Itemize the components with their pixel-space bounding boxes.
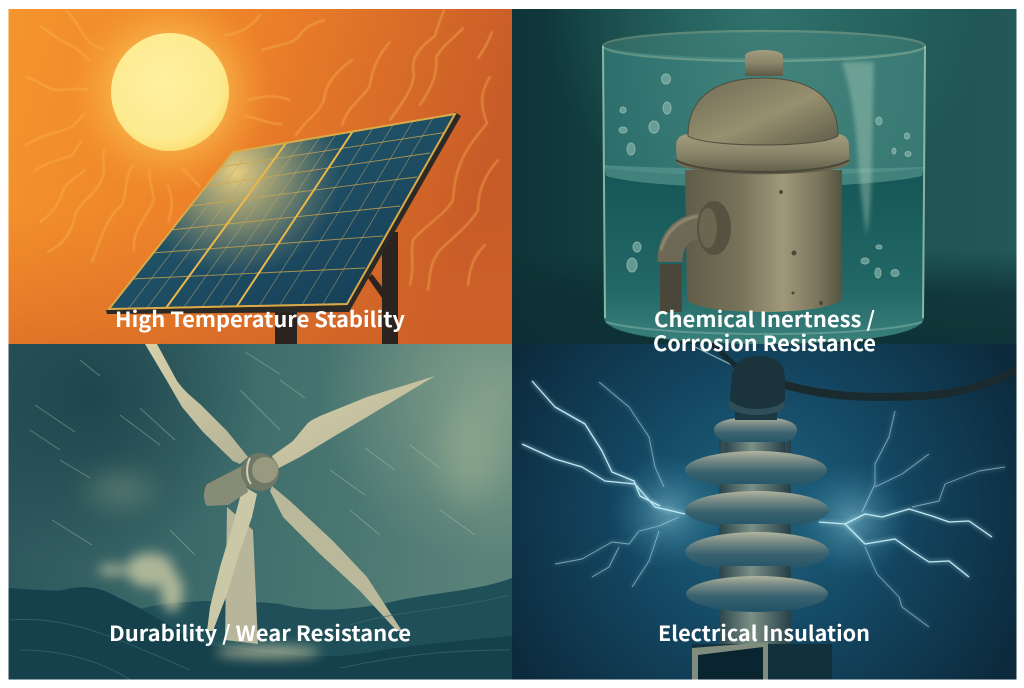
lightning (522, 381, 1005, 627)
icon: insulator (685, 417, 829, 645)
far sea (140, 578, 512, 656)
icon: sun (86, 9, 259, 180)
panel: durability (8, 344, 512, 680)
rain streaks (30, 352, 475, 555)
icon: water bubbles (619, 74, 911, 278)
caption: high temperature stability: High Temperature Stability (115, 304, 405, 334)
icon: metal heater (661, 50, 849, 312)
icon: solar panel support (275, 232, 398, 344)
caption: chemical inertness / corrosion resistance: Corrosion Resistance (653, 328, 876, 358)
clouds (88, 410, 500, 502)
icon: insulator base (692, 642, 832, 680)
sea waves (8, 587, 512, 680)
icon: heat waves (26, 10, 498, 290)
panel: chemical inertness (512, 9, 1016, 344)
sea foam (98, 553, 320, 658)
icon: solar panel (106, 112, 461, 314)
caption: electrical insulation: Electrical Insulation (658, 618, 870, 648)
caption: chemical inertness / corrosion resistance: Chemical Inertness / (654, 304, 875, 334)
icon: glass jar (602, 31, 926, 344)
icon: cable and clamp (695, 344, 1016, 420)
panel: high temperature stability (8, 0, 512, 344)
caption: durability / wear resistance: Durability / Wear Resistance (109, 618, 411, 648)
spark glows (622, 466, 899, 566)
wind turbine (145, 344, 435, 644)
caption: chemical inertness / corrosion resistance (653, 304, 876, 358)
panel: electrical insulation (512, 344, 1016, 680)
